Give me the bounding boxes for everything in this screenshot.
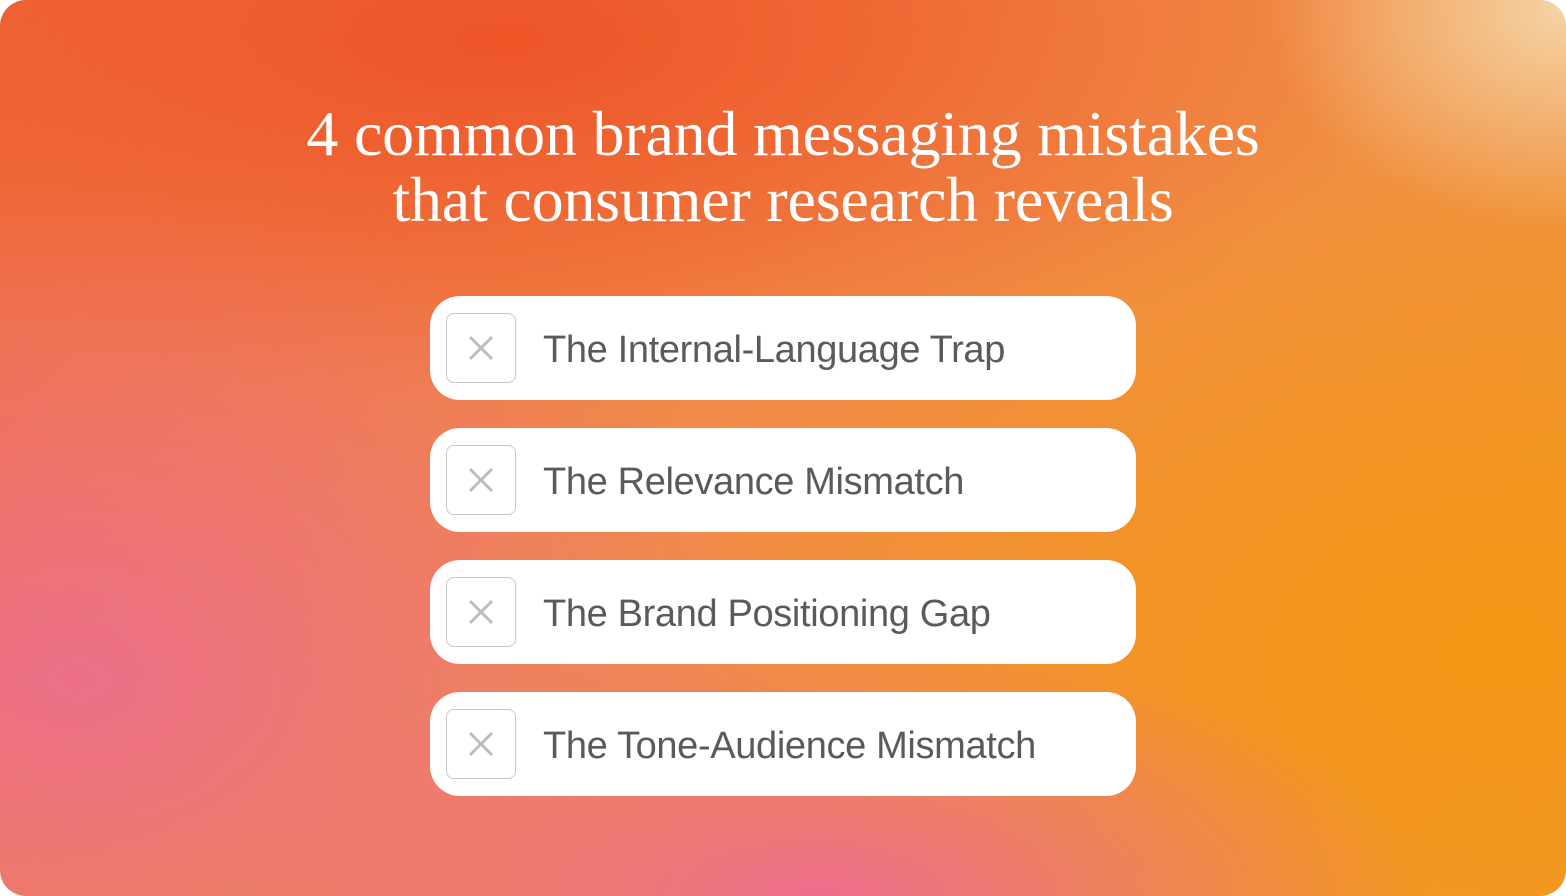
card: tone-audience mismatch <box>430 692 1136 796</box>
card: relevance mismatch <box>430 428 1136 532</box>
card text: The Internal-Language Trap <box>543 329 1005 371</box>
card text: The Relevance Mismatch <box>543 461 964 503</box>
icon: x <box>446 313 516 383</box>
icon: x <box>446 577 516 647</box>
card: internal-language trap <box>430 296 1136 400</box>
card text: The Brand Positioning Gap <box>543 593 991 635</box>
icon: x <box>446 445 516 515</box>
title: that consumer research reveals <box>392 164 1174 235</box>
title <box>306 98 1260 235</box>
icon: x <box>446 709 516 779</box>
card text: The Tone-Audience Mismatch <box>543 725 1036 767</box>
title: 4 common brand messaging mistakes <box>306 98 1260 169</box>
card: brand positioning gap <box>430 560 1136 664</box>
